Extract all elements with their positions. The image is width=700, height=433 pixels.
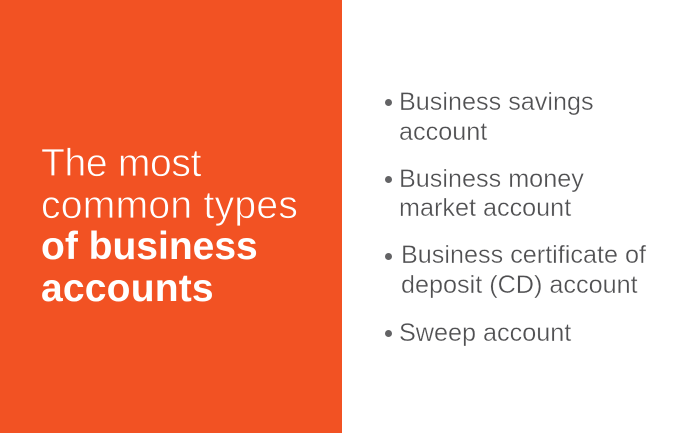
- title: The most: [41, 142, 201, 185]
- list item: business savings account: account: [399, 118, 487, 146]
- list item: business savings account: Business savings: [399, 88, 594, 116]
- title: [41, 142, 298, 310]
- list item: business savings account: [385, 88, 594, 146]
- list item: sweep account: Sweep account: [399, 319, 571, 347]
- title: common types: [41, 184, 298, 227]
- title: accounts: [41, 267, 214, 310]
- list item: business certificate of deposit account: [385, 241, 646, 299]
- list item: business money market account: [385, 165, 584, 222]
- panel: orange title background: [0, 0, 342, 433]
- title: of business: [41, 225, 258, 268]
- list item: business certificate of deposit account: Business certificate of: [401, 241, 646, 269]
- list item: business money market account: Business money: [399, 165, 584, 193]
- list item: business money market account: market account: [399, 194, 571, 222]
- list item: business certificate of deposit account: deposit (CD) account: [401, 271, 638, 299]
